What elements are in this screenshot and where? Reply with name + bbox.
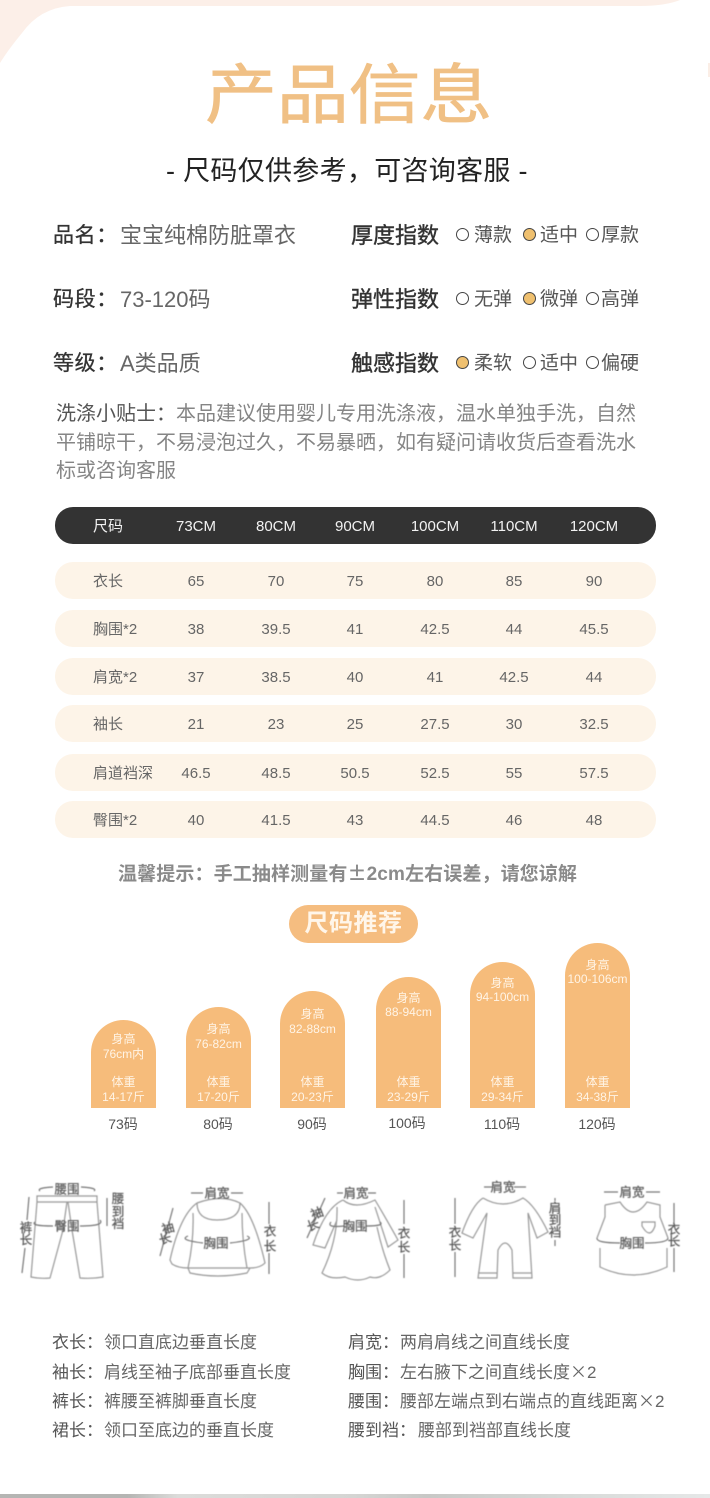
measurement definitions: left column: 领口至底边的垂直长度 (104, 1421, 274, 1440)
washing tips: 洗涤小贴士：本品建议使用婴儿专用洗涤液，温水单独手洗，自然 (56, 403, 636, 425)
size bar 90: 身高 (300, 1007, 324, 1021)
size bar 73 (91, 1020, 156, 1108)
table row: length: 65 (188, 573, 204, 590)
table header: 90CM (335, 518, 375, 535)
table row: crotch depth: 55 (506, 765, 522, 782)
diagram: sweatshirt: 衣 (264, 1224, 277, 1238)
thickness index: 适中 (540, 225, 578, 246)
diagram: dress: 胸围 (342, 1218, 368, 1234)
table row: hip: 43 (347, 812, 363, 829)
table row: sleeve: 21 (188, 716, 204, 733)
diagram: trousers: 臀围 (54, 1220, 80, 1234)
measurement definitions: left column: 裙长： (52, 1421, 103, 1440)
text: 宝宝纯棉防脏罩衣 (120, 223, 296, 248)
product info: sizes (53, 287, 211, 312)
washing tips: 平铺晾干，不易浸泡过久，不易暴晒，如有疑问请收货后查看洗水 (56, 432, 636, 454)
table row: shoulder (55, 658, 656, 695)
size bar 110: 身高 (490, 976, 514, 990)
table row: chest: 42.5 (420, 621, 450, 638)
diagram: sweatshirt (157, 1186, 277, 1276)
table header: 120CM (570, 518, 618, 535)
table row: chest: 41 (347, 621, 363, 638)
thickness index: 薄款 (474, 225, 512, 246)
table row: length (55, 562, 656, 599)
size bar 100: 23-29斤 (387, 1090, 430, 1104)
elasticity index: 弹性指数 (351, 287, 439, 312)
size labels: 120码 (578, 1116, 616, 1132)
size bar 73: 76cm内 (103, 1047, 144, 1061)
elasticity index (351, 287, 639, 312)
table row: chest: 胸围*2 (93, 621, 137, 638)
size bar 80: 17-20斤 (197, 1090, 240, 1104)
thickness index (351, 223, 639, 248)
diagram: sweatshirt: 胸围 (203, 1236, 229, 1250)
table row: length: 80 (427, 573, 443, 590)
measurement definitions: left column: 衣长： (52, 1333, 103, 1352)
diagram: vest (597, 1184, 681, 1275)
size bar 110: 体重 (490, 1075, 514, 1089)
table row: sleeve: 袖长 (93, 716, 123, 733)
table row: hip: 48 (586, 812, 602, 829)
measurement definitions: right column: 腰部到裆部直线长度 (418, 1421, 571, 1440)
table row: chest: 45.5 (579, 621, 609, 638)
size bar 110: 94-100cm (476, 990, 529, 1004)
size labels (108, 1115, 616, 1132)
size bar 120: 体重 (585, 1075, 610, 1089)
table header: 110CM (490, 518, 538, 535)
size bar 90: 82-88cm (289, 1022, 336, 1036)
table row: length: 75 (347, 573, 363, 590)
product info: grade: 等级： (53, 352, 118, 375)
elasticity index: 微弹 (540, 289, 578, 310)
table row: shoulder: 肩宽*2 (93, 669, 137, 686)
table header: 尺码 (93, 518, 123, 535)
table row: hip: 40 (188, 812, 204, 829)
table row: sleeve: 32.5 (579, 716, 609, 733)
diagram: romper: 裆 (549, 1224, 561, 1240)
measurement note: 温馨提示：手工抽样测量有±2cm左右误差，请您谅解 (118, 859, 577, 886)
table row: sleeve: 30 (506, 716, 522, 733)
diagram: vest: 长 (668, 1234, 681, 1248)
table row: sleeve (55, 705, 656, 742)
table row: hip: 44.5 (420, 812, 450, 829)
diagram: sweatshirt: 长 (264, 1240, 277, 1254)
size bar 90: 20-23斤 (291, 1090, 334, 1104)
table row: chest: 39.5 (261, 621, 291, 638)
table row: crotch depth: 57.5 (579, 765, 609, 782)
table row: crotch depth: 52.5 (420, 765, 450, 782)
diagram: dress (305, 1186, 411, 1280)
measurement definitions: left column: 肩线至袖子底部垂直长度 (104, 1363, 291, 1382)
diagram: trousers (20, 1182, 124, 1278)
size bar 100: 身高 (396, 991, 420, 1005)
diagram: dress: 袖 (309, 1204, 325, 1222)
text: 73-120码 (120, 287, 211, 312)
diagram: vest: 衣 (668, 1222, 681, 1236)
table row: shoulder: 41 (427, 669, 443, 686)
table row: crotch depth: 46.5 (181, 765, 211, 782)
table row: sleeve: 25 (347, 716, 363, 733)
text: A类品质 (120, 351, 201, 376)
table header: 100CM (411, 518, 459, 535)
table row: chest: 38 (188, 621, 204, 638)
measurement definitions: right column: 腰围： (348, 1392, 399, 1411)
diagram: romper (449, 1180, 561, 1278)
product info: grade (53, 351, 201, 376)
size bar 100 (376, 977, 441, 1108)
table row: hip: 46 (506, 812, 522, 829)
measurement definitions: right column: 两肩肩线之间直线长度 (400, 1333, 570, 1352)
size labels: 110码 (484, 1116, 520, 1132)
table header: 73CM (176, 518, 216, 535)
diagram: vest: 肩宽 (619, 1184, 645, 1200)
thickness index: 厚度指数 (351, 223, 439, 248)
measurement definitions: right column: 左右腋下之间直线长度×2 (400, 1358, 596, 1383)
diagram: romper: 衣 (449, 1224, 462, 1240)
size recommendation pill (289, 905, 418, 943)
measurement definitions: right column: 胸围： (348, 1363, 399, 1382)
table row: sleeve: 23 (268, 716, 284, 733)
size bar 90: 体重 (300, 1075, 324, 1089)
diagram: trousers: 腰 (112, 1192, 124, 1206)
diagram: trousers: 到 (112, 1205, 124, 1219)
product info: name: 品名： (53, 224, 118, 247)
measurement definitions: left column: 袖长： (52, 1363, 103, 1382)
diagram: trousers: 长 (20, 1233, 33, 1247)
table row: hip: 41.5 (261, 812, 291, 829)
washing tips (56, 402, 636, 482)
size bar 80: 76-82cm (195, 1037, 242, 1051)
size bar 120 (565, 943, 630, 1108)
garment measurement diagrams (20, 1180, 681, 1282)
diagram: sweatshirt: 肩宽 (204, 1186, 230, 1200)
bottom edge strip (0, 1494, 710, 1498)
diagram: trousers: 腰围 (54, 1182, 80, 1196)
size bar 120: 100-106cm (567, 972, 628, 986)
diagram: sweatshirt: 长 (157, 1230, 174, 1247)
product info: sizes: 码段： (53, 288, 118, 311)
size bar 80: 体重 (206, 1075, 230, 1089)
measurement definitions: right column: 腰部左端点到右端点的直线距离×2 (400, 1387, 664, 1412)
size bar 110 (470, 962, 535, 1108)
size bar 90 (280, 991, 345, 1108)
size bar 110: 29-34斤 (481, 1090, 524, 1104)
measurement definitions: left column (52, 1333, 291, 1440)
softness index: 柔软 (474, 353, 512, 374)
table row: chest (55, 610, 656, 647)
softness index: 适中 (540, 353, 578, 374)
table row: shoulder: 37 (188, 669, 204, 686)
table row: shoulder: 38.5 (261, 669, 291, 686)
table row: crotch depth (55, 754, 656, 791)
table row: crotch depth: 48.5 (261, 765, 291, 782)
diagram: vest: 胸围 (619, 1236, 645, 1250)
thickness index: 厚款 (601, 225, 639, 246)
diagram: romper: 肩 (549, 1200, 561, 1216)
measurement definitions: right column (348, 1333, 664, 1440)
table row: crotch depth: 肩道裆深 (93, 765, 153, 782)
diagram: dress: 衣 (398, 1226, 411, 1240)
size bar 73: 体重 (111, 1075, 136, 1089)
softness index: 偏硬 (601, 353, 639, 374)
size labels: 73码 (108, 1116, 138, 1132)
table row: length: 90 (586, 573, 602, 590)
table row: hip (55, 801, 656, 838)
table row: crotch depth: 50.5 (340, 765, 370, 782)
measurement definitions: left column: 领口直底边垂直长度 (104, 1333, 257, 1352)
measurement definitions: right column: 肩宽： (348, 1333, 399, 1352)
size labels: 100码 (388, 1115, 426, 1131)
table row: length: 衣长 (93, 573, 123, 590)
table header: 80CM (256, 518, 296, 535)
elasticity index: 无弹 (474, 289, 512, 310)
size bar 120: 身高 (585, 958, 610, 972)
table row: hip: 臀围*2 (93, 812, 137, 829)
size labels: 90码 (297, 1116, 327, 1132)
title: 产品信息 (205, 60, 492, 132)
washing tips: 标或咨询客服 (56, 460, 176, 482)
table row: length: 85 (506, 573, 522, 590)
table row: sleeve: 27.5 (420, 716, 450, 733)
diagram: trousers: 裤 (20, 1221, 32, 1235)
size bar 73: 14-17斤 (102, 1090, 145, 1104)
table row: length: 70 (268, 573, 284, 590)
diagram: dress: 长 (305, 1217, 322, 1234)
size bar 120: 34-38斤 (576, 1090, 619, 1104)
table row: shoulder: 40 (347, 669, 363, 686)
size bar 73: 身高 (111, 1032, 136, 1046)
measurement definitions: left column: 裤长： (52, 1392, 103, 1411)
table header (55, 507, 656, 544)
softness index (351, 351, 639, 376)
diagram: romper: 肩宽 (490, 1180, 516, 1194)
diagram: dress: 长 (398, 1240, 411, 1254)
background corner decoration (0, 0, 710, 77)
diagram: trousers: 裆 (112, 1216, 124, 1231)
measurement definitions: left column: 裤腰至裤脚垂直长度 (104, 1392, 257, 1411)
table row: chest: 44 (506, 621, 522, 638)
elasticity index: 高弹 (601, 289, 639, 310)
table row: shoulder: 42.5 (499, 669, 529, 686)
size bar 80: 身高 (206, 1022, 230, 1036)
size bar 100: 88-94cm (385, 1005, 432, 1019)
size bar 80 (186, 1007, 251, 1108)
size labels: 80码 (203, 1116, 233, 1132)
product info: name (53, 223, 296, 248)
diagram: sweatshirt: 袖 (160, 1219, 176, 1237)
subtitle: - 尺码仅供参考，可咨询客服 - (166, 156, 528, 186)
diagram: romper: 长 (449, 1238, 462, 1252)
diagram: dress: 肩宽 (343, 1186, 369, 1200)
softness index: 触感指数 (351, 351, 439, 376)
size recommendation pill: 尺码推荐 (304, 910, 402, 937)
diagram: romper: 到 (549, 1214, 561, 1228)
table row: shoulder: 44 (586, 669, 602, 686)
size bar 100: 体重 (396, 1075, 420, 1089)
measurement definitions: right column: 腰到裆： (348, 1421, 416, 1440)
